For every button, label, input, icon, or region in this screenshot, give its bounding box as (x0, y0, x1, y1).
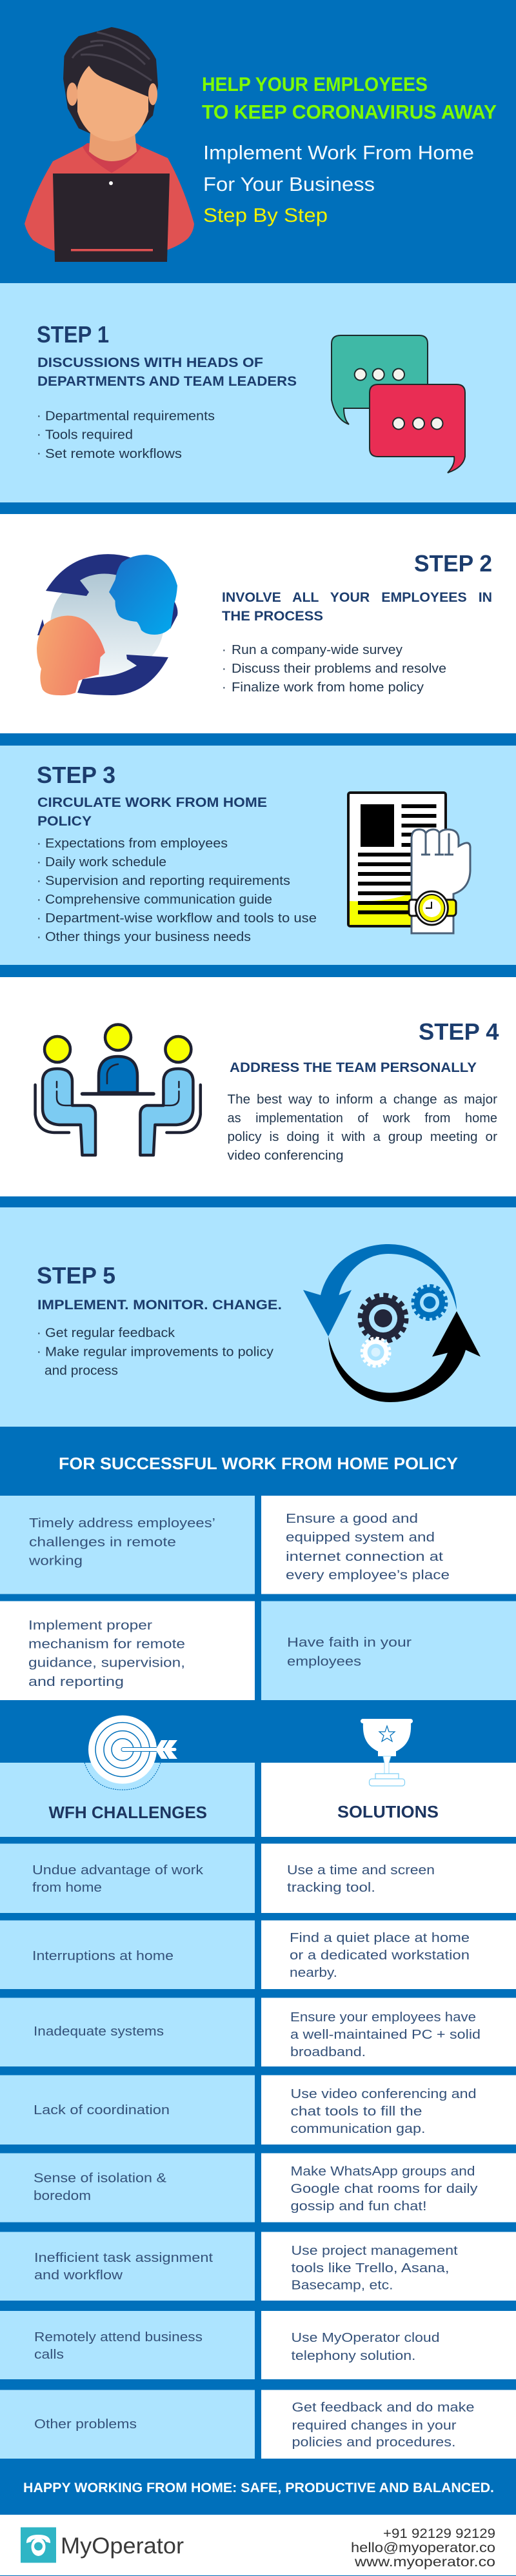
panel: step 5 (0, 1207, 516, 1427)
panel: step 1 (0, 283, 516, 502)
table row: inefficient task assignment: Basecamp, etc. (292, 2278, 393, 2292)
step 3 list: Supervision and reporting requirements (45, 874, 290, 888)
step 3 list (37, 837, 317, 944)
step 2 list: Run a company-wide survey (232, 643, 402, 657)
panel: policy tip 3: guidance, supervision, (28, 1656, 185, 1670)
panel: policy tip 3: and reporting (28, 1675, 124, 1689)
table row: undue advantage: Undue advantage of work (32, 1863, 204, 1878)
step 2 list: · (222, 680, 226, 695)
step 1 subheading: DISCUSSIONS WITH HEADS OF (37, 355, 263, 370)
table row: other problems: Other problems (34, 2417, 137, 2432)
panel: policy tip 2: every employee’s place (286, 1569, 450, 1583)
panel: policy tip 3: mechanism for remote (28, 1637, 185, 1651)
step 1 list: · (37, 409, 41, 423)
panel: policy tip 4 (261, 1601, 516, 1700)
step 1 list (37, 409, 215, 461)
table row: isolation and boredom: Sense of isolation & (34, 2171, 167, 2185)
table row: inadequate systems (0, 1998, 516, 2066)
hero subtitle: Step By Step (203, 204, 328, 226)
table row: isolation and boredom: gossip and fun chat! (290, 2199, 427, 2214)
contact details: hello@myoperator.co (351, 2541, 495, 2555)
step 3 subheading (37, 795, 267, 829)
step 5 list (37, 1326, 273, 1378)
step 2 list: · (222, 662, 226, 676)
hero subtitle (203, 141, 474, 226)
table row: inefficient task assignment: tools like Trello, Asana, (292, 2261, 449, 2275)
table row: other problems: required changes in your (292, 2419, 457, 2433)
step 3 list: · (37, 911, 41, 926)
step 2 list: · (222, 643, 226, 657)
step 1 list: · (37, 446, 41, 461)
step 3 list: · (37, 893, 41, 907)
step 3 list: · (37, 874, 41, 888)
table row: business calls: calls (34, 2348, 64, 2362)
table row: undue advantage: from home (32, 1881, 102, 1895)
table row: inefficient task assignment: and workflow (34, 2268, 123, 2283)
table row: interruptions: Find a quiet place at home (290, 1931, 470, 1945)
contact details: +91 92129 92129 (383, 2526, 495, 2541)
table row: interruptions (0, 1921, 516, 1989)
table row: isolation and boredom: Google chat rooms for daily (290, 2182, 477, 2196)
icon: person with laptop (25, 27, 194, 262)
table row: lack of coordination: chat tools to fill the (290, 2105, 422, 2119)
step 3 list: Daily work schedule (45, 855, 166, 869)
contact details (351, 2526, 495, 2570)
hero title: HELP YOUR EMPLOYEES (202, 73, 428, 95)
step 5 list: · (37, 1345, 41, 1359)
step 2 heading: STEP 2 (414, 550, 492, 577)
step 3 list: · (37, 837, 41, 851)
panel: policy tip 1: Timely address employees’ (29, 1516, 215, 1531)
step 3 list: Expectations from employees (45, 837, 228, 851)
table row: isolation and boredom: Make WhatsApp groups and (290, 2165, 475, 2179)
table row: inefficient task assignment: Use project management (292, 2244, 458, 2258)
panel: policy tip 1: working (28, 1554, 83, 1569)
table row: inadequate systems: Inadequate systems (34, 2025, 164, 2039)
table row: inadequate systems: a well-maintained PC + solid (290, 2028, 481, 2042)
panel: step 4 (0, 977, 516, 1196)
panel: policy tip 4: Have faith in your (287, 1636, 412, 1650)
step 2 list (222, 643, 446, 695)
hero subtitle: For Your Business (203, 173, 375, 195)
table row: isolation and boredom: boredom (34, 2189, 91, 2203)
table row: other problems: Get feedback and do make (292, 2401, 475, 2415)
panel: policy tip 2: internet connection at (286, 1550, 444, 1564)
table row: interruptions: nearby. (290, 1966, 337, 1980)
panel: WFH challenges header (0, 1716, 255, 1837)
step 5 list: · (37, 1326, 41, 1340)
step 4 heading: STEP 4 (419, 1018, 499, 1045)
step 4 paragraph (227, 1093, 497, 1163)
table row: interruptions: Interruptions at home (32, 1949, 174, 1963)
closing banner: HAPPY WORKING FROM HOME: SAFE, PRODUCTIVE AND BALANCED. (23, 2481, 494, 2495)
step 5 list: Make regular improvements to policy (45, 1345, 273, 1360)
table row: lack of coordination: Lack of coordination (34, 2103, 170, 2117)
icon: team meeting (35, 1024, 201, 1155)
step 3 subheading: POLICY (37, 814, 92, 829)
step 3 list: Comprehensive communication guide (45, 893, 272, 907)
table row: inadequate systems: Ensure your employees have (290, 2010, 476, 2025)
step 1 subheading: DEPARTMENTS AND TEAM LEADERS (37, 374, 297, 389)
step 1 list: Tools required (45, 428, 133, 442)
table row: isolation and boredom (0, 2153, 516, 2223)
panel: policy tip 2: Ensure a good and (286, 1512, 418, 1526)
table row: business calls: Remotely attend business (34, 2330, 203, 2344)
panel: solutions header (261, 1719, 516, 1837)
logo wordmark: MyOperator (61, 2533, 184, 2559)
heading: WFH challenges: WFH CHALLENGES (49, 1803, 207, 1822)
panel: policy tip 1 (0, 1496, 255, 1594)
step 4 subheading: ADDRESS THE TEAM PERSONALLY (230, 1060, 477, 1075)
heading: solutions: SOLUTIONS (337, 1802, 439, 1821)
table row: undue advantage: tracking tool. (287, 1881, 375, 1895)
step 1 list: Set remote workflows (45, 447, 182, 461)
contact details: www.myoperator.co (354, 2555, 495, 2570)
table row: undue advantage (0, 1843, 516, 1913)
step 2 subheading: THE PROCESS (222, 609, 323, 624)
icon: chat bubbles (332, 335, 465, 473)
step 4 paragraph: The best way to inform a change as major (227, 1093, 497, 1107)
panel: policy tip 1: challenges in remote (29, 1535, 176, 1549)
step 5 list: Get regular feedback (45, 1326, 175, 1340)
step 3 list: · (37, 930, 41, 944)
table row: lack of coordination (0, 2076, 516, 2145)
table row: other problems: policies and procedures. (292, 2435, 455, 2450)
table row: other problems (0, 2390, 516, 2459)
table row: business calls (0, 2311, 516, 2379)
table row: lack of coordination: Use video conferencing and (290, 2087, 476, 2101)
hero title: TO KEEP CORONAVIRUS AWAY (202, 101, 497, 123)
step 1 list: Departmental requirements (45, 409, 215, 423)
panel: step 3 (0, 746, 516, 965)
icon: target with arrow (84, 1716, 177, 1790)
table row: undue advantage: Use a time and screen (287, 1863, 435, 1878)
step 3 list: · (37, 855, 41, 869)
icon: two heads exchanging (37, 554, 177, 695)
step 1 list: · (37, 428, 41, 442)
table row: inefficient task assignment: Inefficient task assignment (34, 2251, 213, 2265)
icon: change cycle with gears (303, 1244, 481, 1402)
table row: interruptions: or a dedicated workstation (290, 1948, 470, 1963)
panel: policy tip 3 (0, 1601, 255, 1700)
step 1 heading: STEP 1 (37, 321, 109, 348)
step 5 subheading: IMPLEMENT. MONITOR. CHANGE. (37, 1298, 282, 1313)
step 2 list: Discuss their problems and resolve (232, 662, 446, 676)
step 5 list: and process (45, 1363, 118, 1378)
panel: policy tip 3: Implement proper (28, 1619, 152, 1633)
step 2 list: Finalize work from home policy (232, 680, 424, 695)
table row: inefficient task assignment (0, 2232, 516, 2301)
panel: policy tip 2: equipped system and (286, 1531, 435, 1545)
panel: policy tip 4: employees (287, 1655, 361, 1669)
step 3 heading: STEP 3 (37, 762, 115, 788)
table row: lack of coordination: communication gap. (290, 2122, 426, 2136)
table row: business calls: telephony solution. (292, 2349, 415, 2363)
panel: step 2 (0, 514, 516, 733)
step 3 list: Department-wise workflow and tools to use (45, 911, 317, 926)
step 3 list: Other things your business needs (45, 930, 251, 944)
step 4 paragraph: as implementation of work from home (227, 1111, 497, 1125)
step 2 subheading (222, 590, 492, 624)
step 2 subheading: INVOLVE ALL YOUR EMPLOYEES IN (222, 590, 492, 605)
hero subtitle: Implement Work From Home (203, 141, 474, 164)
table row: inadequate systems: broadband. (290, 2045, 366, 2059)
icon: trophy (361, 1719, 413, 1786)
step 4 paragraph: policy is doing it with a group meeting or (227, 1130, 497, 1144)
icon: document and hand with watch (348, 793, 470, 933)
step 5 heading: STEP 5 (37, 1262, 115, 1289)
panel: footer (0, 2515, 516, 2575)
step 4 paragraph: video conferencing (227, 1149, 343, 1163)
hero title (202, 73, 497, 123)
step 3 subheading: CIRCULATE WORK FROM HOME (37, 795, 267, 810)
panel: hero header (0, 0, 516, 283)
icon: MyOperator logo (21, 2527, 56, 2563)
panel: policy tip 2 (261, 1496, 516, 1594)
step 1 subheading (37, 355, 297, 389)
table row: business calls: Use MyOperator cloud (292, 2331, 440, 2345)
heading: for successful work from home policy: FOR SUCCESSFUL WORK FROM HOME POLICY (59, 1454, 458, 1473)
